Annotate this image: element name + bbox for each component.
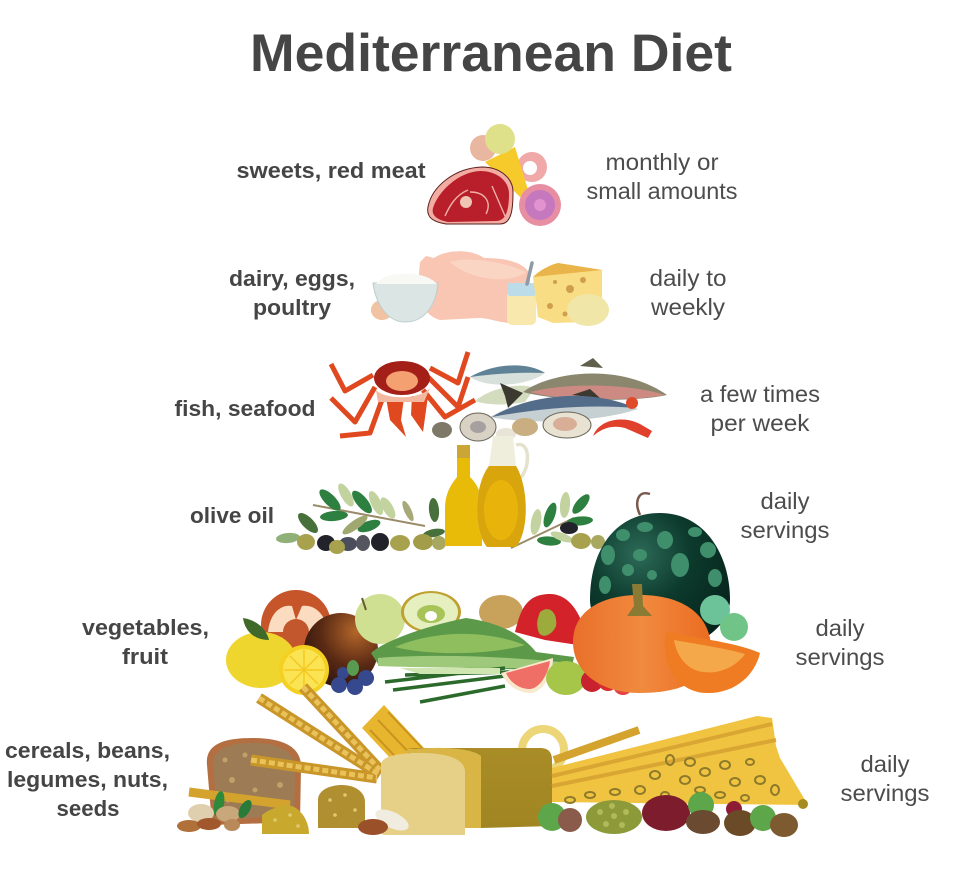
- label: vegetables, fruit: vegetables,: [82, 615, 209, 640]
- frequency: daily servings: daily: [860, 751, 910, 777]
- food: sweets and red meat: [428, 124, 561, 226]
- label: fish, seafood: fish, seafood: [174, 396, 316, 421]
- frequency: monthly or small amounts: [586, 149, 738, 204]
- tier 5: vegetables, fruit: [82, 493, 884, 702]
- frequency: monthly or small amounts: monthly or: [606, 149, 719, 175]
- frequency: daily to weekly: daily to: [650, 265, 726, 291]
- frequency: daily servings: [740, 488, 830, 543]
- label: cereals, beans, legumes, nuts, seeds: cereals, beans,: [5, 738, 170, 763]
- frequency: monthly or small amounts: small amounts: [586, 178, 738, 204]
- title: Mediterranean Diet: [250, 24, 732, 83]
- label: vegetables, fruit: [82, 615, 209, 669]
- label: cereals, beans, legumes, nuts, seeds: legumes, nuts,: [7, 767, 168, 792]
- frequency: daily servings: servings: [740, 517, 830, 543]
- tier 1: sweets, red meat: [236, 124, 738, 226]
- tier 6: cereals, beans, legumes, nuts, seeds: [5, 687, 930, 837]
- frequency: daily servings: [796, 615, 884, 670]
- food: crab, fish, shellfish: [331, 352, 667, 441]
- frequency: daily servings: daily: [760, 488, 810, 514]
- tier 4: olive oil: [190, 436, 830, 554]
- food: bread, grains, pasta, nuts: [177, 687, 808, 837]
- frequency: daily servings: servings: [796, 644, 884, 670]
- frequency: a few times per week: a few times: [700, 381, 820, 407]
- tier 3: fish, seafood: [174, 352, 820, 441]
- label: dairy, eggs, poultry: dairy, eggs,: [229, 266, 355, 291]
- label: olive oil: olive oil: [190, 503, 274, 528]
- tier 2: dairy, eggs, poultry: [229, 251, 726, 326]
- frequency: daily servings: servings: [840, 780, 930, 806]
- label: vegetables, fruit: fruit: [122, 644, 169, 669]
- frequency: daily servings: daily: [816, 615, 865, 641]
- frequency: a few times per week: [700, 381, 820, 436]
- food: poultry, cheese, cottage cheese, egg: [371, 251, 609, 326]
- frequency: daily to weekly: weekly: [650, 294, 726, 320]
- frequency: daily to weekly: [650, 265, 726, 320]
- frequency: a few times per week: per week: [710, 410, 810, 436]
- label: dairy, eggs, poultry: [229, 266, 355, 320]
- food: fruit and vegetables: [226, 493, 760, 702]
- label: cereals, beans, legumes, nuts, seeds: [5, 738, 170, 821]
- label: cereals, beans, legumes, nuts, seeds: seeds: [56, 796, 120, 821]
- label: dairy, eggs, poultry: poultry: [253, 295, 332, 320]
- food: olive oil bottles and olive branches: [276, 436, 605, 554]
- label: sweets, red meat: sweets, red meat: [236, 158, 426, 183]
- frequency: daily servings: [840, 751, 930, 806]
